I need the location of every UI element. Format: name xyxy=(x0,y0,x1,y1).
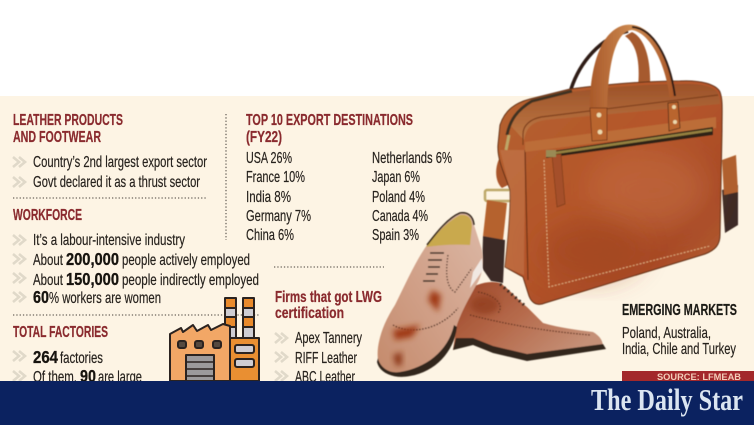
bullet: 90 large: Of them, xyxy=(33,369,77,386)
list: destinations column two xyxy=(372,150,452,244)
left strap and buckle xyxy=(482,148,514,283)
bullet: women workers: % workers are women xyxy=(49,290,161,307)
source bar: SOURCE: LFMEAB xyxy=(657,372,742,382)
list: destinations column one: Germany 7% xyxy=(246,208,311,225)
front panel edge xyxy=(523,95,718,145)
laces xyxy=(423,253,444,281)
list: destinations column two: Poland 4% xyxy=(372,189,425,206)
heading: LWG certification xyxy=(275,289,382,322)
bullet: 90 large xyxy=(13,366,142,386)
stitching xyxy=(544,160,710,287)
panel: emerging markets xyxy=(622,302,737,358)
text: market list: Poland, Australia, xyxy=(622,325,711,342)
bullet: Apex Tannery: Apex Tannery xyxy=(295,330,362,347)
panel: leather products and footwear xyxy=(13,112,260,386)
front handle xyxy=(590,25,676,112)
icon: factory xyxy=(170,298,259,381)
cream background panel xyxy=(0,96,754,381)
shoe sole xyxy=(377,325,457,377)
bullet: 264 factories: factories xyxy=(60,350,103,367)
heading: LWG certification: Firms that got LWG xyxy=(275,289,382,306)
heading: total factories: TOTAL FACTORIES xyxy=(13,324,108,341)
bag body xyxy=(498,81,722,304)
list: destinations column two: Netherlands 6% xyxy=(372,150,452,167)
list: destinations column one: France 10% xyxy=(246,169,305,186)
bullet: 264 factories: 264 xyxy=(33,347,58,367)
bullet: 200,000 employed: 200,000 xyxy=(66,249,119,269)
list: destinations column two: Canada 4% xyxy=(372,208,428,225)
bullet: women workers: 60 xyxy=(33,287,49,307)
bullet: labour-intensive: It’s a labour-intensive industry xyxy=(33,232,185,249)
bullet: thrust sector xyxy=(13,174,200,191)
side zip xyxy=(507,91,572,135)
heading: export destinations xyxy=(246,112,413,146)
panel: LWG certified firms xyxy=(275,289,382,386)
list: destinations column one: China 6% xyxy=(246,227,294,244)
bullet: ABC Leather: ABC Leather xyxy=(295,369,355,386)
list: destinations column one xyxy=(246,150,311,244)
bullet: 200,000 employed: people actively employed xyxy=(122,252,250,269)
bullet: 150,000 employed: 150,000 xyxy=(66,269,119,289)
polish patches xyxy=(393,325,420,340)
bullet: export sector: Country’s 2nd largest export sector xyxy=(33,154,207,171)
side gusset shading xyxy=(500,150,525,275)
bullet: 150,000 employed xyxy=(13,269,259,289)
list: destinations column two: Spain 3% xyxy=(372,227,419,244)
rivets xyxy=(597,105,677,134)
heading: leather products: LEATHER PRODUCTS xyxy=(13,112,123,129)
shoe insole xyxy=(426,215,472,247)
heading: export destinations: TOP 10 EXPORT DESTINATIONS xyxy=(246,112,413,129)
image: leather shoes xyxy=(377,213,606,377)
front shoe xyxy=(377,213,483,377)
heading: LWG certification: certification xyxy=(275,305,344,322)
zip pull xyxy=(552,154,565,207)
heading: leather products: AND FOOTWEAR xyxy=(13,129,101,146)
heading: workforce: WORKFORCE xyxy=(13,207,82,224)
heading: leather products xyxy=(13,112,123,146)
list: destinations column two: Japan 6% xyxy=(372,169,420,186)
front zipper xyxy=(546,127,713,158)
back shoe xyxy=(453,282,606,361)
panel: top 10 export destinations xyxy=(246,112,452,244)
bullet: RIFF Leather: RIFF Leather xyxy=(295,350,357,367)
list: destinations column one: India 8% xyxy=(246,189,291,206)
right strap xyxy=(722,185,738,233)
bullet: labour-intensive xyxy=(13,232,185,249)
top gusset xyxy=(510,84,720,140)
footer band xyxy=(0,381,754,425)
bullet: 200,000 employed: About xyxy=(33,252,63,269)
bullet: thrust sector: Govt declared it as a thrust sector xyxy=(33,174,200,191)
bullet: 200,000 employed xyxy=(13,249,250,269)
bullet: women workers xyxy=(13,287,161,307)
bullet: 90 large: are large xyxy=(98,369,142,386)
bullet: 90 large: 90 xyxy=(80,366,96,386)
text: market list xyxy=(622,325,736,358)
source bar xyxy=(622,371,754,382)
bullet: export sector xyxy=(13,154,207,171)
back handle xyxy=(571,31,628,89)
soft light patches xyxy=(590,152,710,228)
image: leather bag xyxy=(482,25,738,304)
bullet: 264 factories xyxy=(13,347,103,367)
bullet: 150,000 employed: About xyxy=(33,272,63,289)
list: destinations column one: USA 26% xyxy=(246,150,292,167)
bullet: 150,000 employed: people indirectly employed xyxy=(122,272,259,289)
heading: export destinations: (FY22) xyxy=(246,129,282,146)
